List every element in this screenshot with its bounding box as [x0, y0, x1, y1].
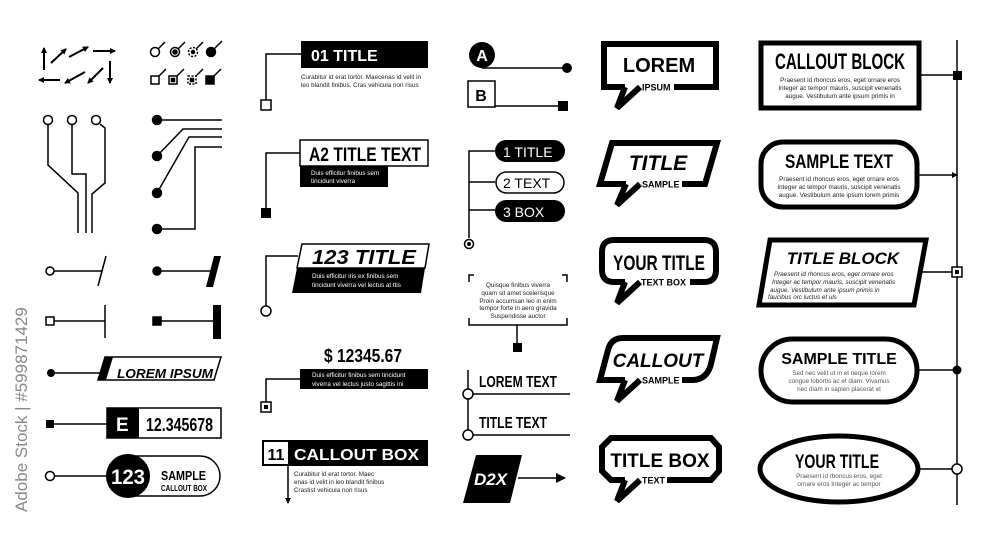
- speech bubble: YOUR TITLE: TEXT BOX: [641, 278, 686, 288]
- label: 123 sample callout box: [46, 454, 220, 498]
- speech bubble: TITLE BOX: TEXT: [642, 476, 666, 486]
- bracket text box: Suspendisse auctor: [490, 313, 546, 320]
- icon: circuit traces right: [152, 116, 222, 234]
- label: 123 sample callout box: 123: [111, 466, 145, 489]
- icon: arrows set: [39, 47, 115, 83]
- labels: LOREM TEXT / TITLE TEXT: [463, 370, 570, 440]
- callout: 11 CALLOUT BOX: [262, 440, 428, 503]
- list: 1 TITLE 2 TEXT 3 BOX: 2 TEXT: [503, 175, 551, 191]
- callout: 01 TITLE: leo blandit finibus. Cras vehicula non risus: [301, 82, 419, 89]
- block: YOUR TITLE oval: YOUR TITLE: [795, 452, 879, 473]
- callout: $ 12345.67: $ 12345.67: [324, 346, 402, 366]
- block: TITLE BLOCK: TITLE BLOCK: [787, 249, 901, 268]
- label: E 12.345678: E: [116, 415, 129, 436]
- label: 123 sample callout box: SAMPLE: [161, 468, 206, 483]
- speech bubble: TITLE BOX: [602, 438, 719, 501]
- block: TITLE BLOCK: Integer ac tempor mauris, suscipit venenatis: [772, 279, 896, 286]
- block: SAMPLE TEXT: SAMPLE TEXT: [785, 152, 893, 173]
- bracket text box: Proin accumsan leo in enim: [479, 298, 557, 305]
- block: SAMPLE TEXT: augue. Vestibulum ante ipsum lorem primis: [779, 192, 899, 199]
- speech bubble: LOREM: LOREM: [623, 55, 695, 77]
- bracket text box: Quisque finibus viverra: [486, 282, 551, 289]
- label: LOREM IPSUM: LOREM IPSUM: [117, 366, 214, 381]
- marker: A: A: [476, 48, 488, 65]
- speech bubble: CALLOUT: CALLOUT: [613, 351, 705, 372]
- callout: $ 12345.67: viverra vel lectus justo sagittis ini: [312, 381, 403, 388]
- icon: pin slash open: [46, 256, 106, 286]
- callout: 11 CALLOUT BOX: enas id velit in leo blandit finibus: [294, 479, 384, 486]
- block: YOUR TITLE oval: Praesent id rhoncus eros, eget: [796, 473, 882, 480]
- block: SAMPLE TITLE: congue lobortis ac et diam. Vivamus: [788, 378, 890, 385]
- block: CALLOUT BLOCK: Praesent id rhoncus eros, eget ornare eros: [780, 77, 900, 84]
- speech bubble: LOREM: [604, 44, 716, 108]
- label: E 12.345678: 12.345678: [146, 415, 213, 435]
- block: SAMPLE TITLE: nec diam in sapien placerat et: [797, 386, 881, 393]
- icon: pin bar thick: [153, 305, 221, 339]
- labels: LOREM TEXT / TITLE TEXT: TITLE TEXT: [479, 415, 547, 432]
- block: SAMPLE TITLE: Sed nec velit ut in et neque lorem: [792, 370, 886, 377]
- block: TITLE BLOCK: faucibus orc luctus et uls: [768, 294, 838, 301]
- speech bubble: TITLE: [600, 143, 717, 205]
- speech bubble: TITLE: TITLE: [629, 152, 688, 175]
- callout: A2 TITLE TEXT: tincidunt viverra: [311, 178, 356, 185]
- callout: 123 TITLE: tincidunt viverra vel lectus at ttis: [312, 282, 401, 289]
- block: TITLE BLOCK: augue. Vestibulum ante ipsum primis in: [770, 287, 880, 294]
- label: D2X arrow: D2X: [474, 470, 509, 489]
- marker: A: [469, 42, 572, 73]
- block: TITLE BLOCK: [759, 240, 962, 305]
- bracket text box: tempor forte in aero gravida: [479, 305, 557, 312]
- callout: 123 TITLE: [261, 244, 429, 316]
- speech bubble: YOUR TITLE: [602, 240, 716, 303]
- speech bubble: TITLE: SAMPLE: [642, 180, 680, 190]
- labels: LOREM TEXT / TITLE TEXT: LOREM TEXT: [479, 374, 557, 391]
- bracket text box: [469, 275, 567, 352]
- block: SAMPLE TITLE: SAMPLE TITLE: [781, 351, 897, 368]
- list: 1 TITLE 2 TEXT 3 BOX: [464, 140, 565, 248]
- icon: circuit traces left: [44, 116, 105, 233]
- callout: 11 CALLOUT BOX: Curabitur id erat tortor. Maec: [294, 471, 374, 478]
- callout: 11 CALLOUT BOX: 11: [268, 447, 285, 464]
- block: SAMPLE TEXT: [761, 142, 957, 207]
- block: SAMPLE TEXT: Praesent id rhoncus eros, eget ornare eros: [779, 176, 899, 183]
- callout: 11 CALLOUT BOX: CALLOUT BOX: [294, 447, 419, 464]
- callout: A2 TITLE TEXT: A2 TITLE TEXT: [309, 145, 421, 166]
- callout: 01 TITLE: Curabitur id erat tortor. Maecenas id velit in: [301, 74, 422, 81]
- list: 1 TITLE 2 TEXT 3 BOX: 3 BOX: [503, 204, 545, 220]
- speech bubble: CALLOUT: [600, 338, 717, 401]
- label: D2X arrow: [463, 455, 565, 503]
- speech bubble: TITLE BOX: TITLE BOX: [610, 451, 710, 472]
- block: SAMPLE TEXT: Integer ac tempor mauris, suscipit venenatis: [777, 184, 901, 191]
- speech bubble: YOUR TITLE: YOUR TITLE: [613, 252, 705, 275]
- callout: $ 12345.67: [261, 346, 428, 412]
- bracket text box: quam sit amet scelerisque: [481, 290, 555, 297]
- block: YOUR TITLE oval: [760, 436, 962, 502]
- block: CALLOUT BLOCK: CALLOUT BLOCK: [775, 49, 905, 74]
- label: E 12.345678: [46, 408, 221, 438]
- callout: 11 CALLOUT BOX: Crastist vehicula non risus: [294, 487, 368, 494]
- watermark: stock id: Adobe Stock | #599871429: [12, 307, 31, 512]
- speech bubble: LOREM: IPSUM: [642, 82, 671, 92]
- block: CALLOUT BLOCK: [761, 43, 962, 108]
- callout: 123 TITLE: 123 TITLE: [312, 247, 417, 269]
- icon: pin bar open square: [46, 305, 105, 338]
- speech bubble: CALLOUT: SAMPLE: [642, 376, 680, 386]
- block: CALLOUT BLOCK: augue. Vestibulum ante ipsum primis in: [785, 93, 895, 100]
- label: 123 sample callout box: CALLOUT BOX: [161, 484, 208, 493]
- block: TITLE BLOCK: Praesent id rhoncus eros, eget ornare eros: [774, 271, 895, 278]
- callout: 01 TITLE: [261, 41, 428, 110]
- list: 1 TITLE 2 TEXT 3 BOX: 1 TITLE: [503, 144, 553, 160]
- callout: 01 TITLE: 01 TITLE: [311, 48, 378, 65]
- timeline spine: [956, 40, 958, 505]
- callout: A2 TITLE TEXT: [261, 140, 428, 218]
- callout: $ 12345.67: Duis efficitur finibus sem tincidunt: [312, 372, 406, 379]
- label: LOREM IPSUM: [47, 357, 221, 381]
- marker: B: B: [475, 88, 487, 105]
- marker: B: [468, 81, 568, 111]
- icon: pin markers: [150, 41, 222, 84]
- block: CALLOUT BLOCK: Integer ac tempor mauris, suscipit venenatis: [778, 85, 902, 92]
- icon: pin slash thick: [153, 256, 221, 287]
- block: SAMPLE TITLE: [761, 339, 962, 402]
- block: YOUR TITLE oval: ornare eros Integer ac tempor: [797, 481, 881, 488]
- callout: 123 TITLE: Duis efficitur iris ex finibus sem: [312, 273, 398, 280]
- callout: A2 TITLE TEXT: Duis efficitur finibus sem: [311, 170, 379, 177]
